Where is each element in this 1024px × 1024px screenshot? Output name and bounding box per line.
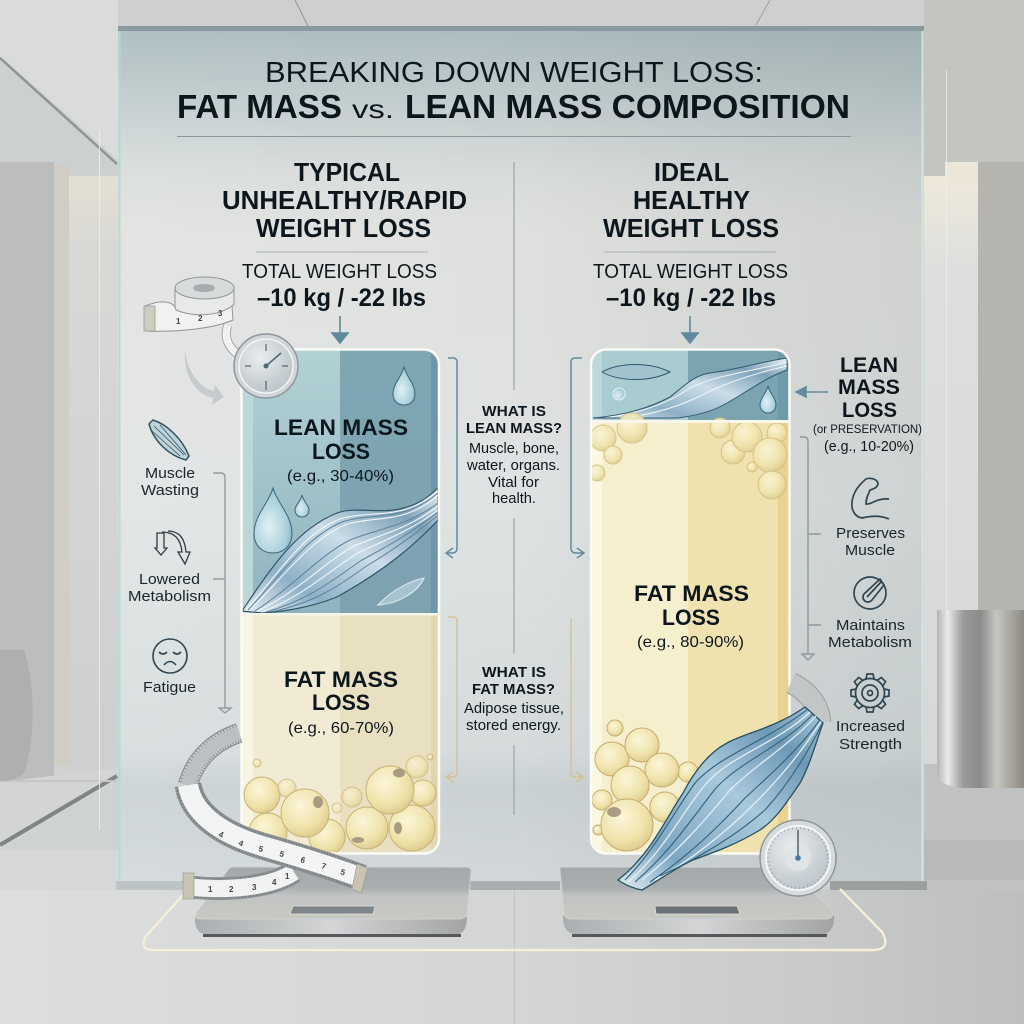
tape measure: large, left: 7 bbox=[320, 861, 328, 871]
callout: what is lean mass: water, organs. bbox=[466, 458, 560, 474]
callout: what is lean mass: LEAN MASS? bbox=[466, 420, 562, 437]
right bar outline bbox=[591, 350, 790, 854]
title: LEAN MASS COMPOSITION bbox=[405, 88, 850, 125]
heading: healthy weight loss bbox=[603, 159, 779, 243]
segment: fat mass bbox=[242, 615, 439, 853]
clock: right bbox=[760, 820, 836, 896]
bracket arrows: right bar bbox=[571, 358, 584, 558]
left bar labels: fat: (e.g., 60-70%) bbox=[288, 720, 394, 737]
callout: what is lean mass: health. bbox=[492, 491, 536, 507]
heading: unhealthy weight loss: UNHEALTHY/RAPID bbox=[222, 187, 467, 215]
tape roll: top left: 1 bbox=[176, 317, 181, 326]
label: lean mass loss right: MASS bbox=[838, 375, 900, 399]
total weight loss: left: TOTAL WEIGHT LOSS bbox=[242, 260, 437, 283]
background: stone vase bbox=[0, 650, 33, 781]
tape: main strip bbox=[188, 785, 362, 878]
large muscle: right bbox=[618, 707, 823, 890]
label: increased strength: Strength bbox=[839, 736, 902, 753]
right stacked bar bbox=[589, 350, 789, 853]
right icons column bbox=[828, 478, 912, 753]
title: BREAKING DOWN WEIGHT LOSS: bbox=[265, 57, 763, 89]
center divider bbox=[513, 162, 515, 815]
icon: gauge bbox=[854, 577, 886, 609]
tape measure: large, left: 4 bbox=[272, 878, 277, 887]
left bar labels: lean: LOSS bbox=[312, 439, 370, 464]
icon: muscle bbox=[149, 420, 189, 460]
left bar labels: lean: LEAN MASS bbox=[274, 415, 408, 440]
total weight loss: right: TOTAL WEIGHT LOSS bbox=[593, 260, 788, 283]
heading: healthy weight loss: IDEAL bbox=[654, 159, 729, 187]
callout: what is lean mass: WHAT IS bbox=[482, 403, 546, 420]
small muscle and drops bbox=[602, 364, 776, 413]
label: lean mass loss right bbox=[813, 353, 922, 455]
tape: lower strip bbox=[190, 872, 294, 889]
callout: what is fat mass: WHAT IS bbox=[482, 664, 546, 681]
label: preserves muscle bbox=[836, 525, 905, 559]
arrow: total to right bar bbox=[682, 316, 698, 343]
left bar labels: lean bbox=[274, 415, 408, 485]
tape measure: behind right muscle bbox=[791, 683, 820, 722]
label: maintains metabolism bbox=[828, 617, 912, 651]
tape measure: large, left: 4 bbox=[237, 838, 245, 849]
icon: tired face bbox=[153, 639, 187, 673]
callout: what is lean mass: Vital for bbox=[488, 475, 539, 491]
label: maintains metabolism: Metabolism bbox=[828, 634, 912, 651]
title: vs. bbox=[352, 94, 394, 124]
heading: healthy weight loss: HEALTHY bbox=[633, 187, 750, 215]
left bar labels: fat bbox=[284, 667, 398, 737]
floor glow line bbox=[143, 889, 885, 950]
label: muscle wasting: Wasting bbox=[141, 482, 199, 499]
bracket arrows: left bar bbox=[446, 358, 457, 558]
callout: what is lean mass bbox=[466, 403, 562, 507]
fat cells: bottom bbox=[592, 720, 698, 851]
right bar labels: fat bbox=[634, 581, 749, 651]
scale: left bbox=[195, 867, 471, 937]
label: muscle wasting: Muscle bbox=[145, 465, 195, 482]
label: lean mass loss right: LEAN bbox=[840, 353, 898, 377]
title: FAT MASS bbox=[177, 88, 342, 125]
fat cells: top bbox=[589, 413, 787, 499]
heading: unhealthy weight loss: WEIGHT LOSS bbox=[256, 215, 431, 243]
heading: healthy weight loss: WEIGHT LOSS bbox=[603, 215, 779, 243]
label: preserves muscle: Muscle bbox=[845, 542, 895, 559]
label: lowered metabolism: Metabolism bbox=[128, 588, 211, 605]
label: lowered metabolism: Lowered bbox=[139, 571, 200, 588]
tape measure: large, left: 3 bbox=[252, 883, 257, 892]
segment: lean mass bbox=[591, 350, 789, 420]
clock: left bbox=[234, 334, 298, 398]
bracket arrow: symptoms bbox=[213, 473, 231, 713]
total weight loss: right bbox=[593, 260, 788, 312]
left icons column bbox=[128, 420, 211, 696]
arrow: lean callout bbox=[796, 387, 828, 397]
callout: what is fat mass: stored energy. bbox=[466, 718, 561, 734]
arrow: total to left bar bbox=[332, 316, 348, 343]
fat cells bbox=[244, 754, 436, 855]
label: maintains metabolism: Maintains bbox=[836, 617, 905, 634]
icon: flexed arm bbox=[852, 478, 889, 519]
right bar labels: fat: LOSS bbox=[662, 605, 720, 630]
title bbox=[177, 57, 850, 125]
callout: what is fat mass: Adipose tissue, bbox=[464, 701, 564, 717]
label: lean mass loss right: (or PRESERVATION) bbox=[813, 424, 922, 436]
heading: unhealthy weight loss: TYPICAL bbox=[294, 159, 400, 187]
total weight loss: right: –10 kg / -22 lbs bbox=[606, 284, 776, 312]
tape roll: top left: 3 bbox=[218, 309, 223, 318]
total weight loss: left bbox=[242, 260, 437, 312]
heading: unhealthy weight loss bbox=[222, 159, 467, 243]
callout: what is lean mass: Muscle, bone, bbox=[469, 441, 559, 457]
left stacked bar bbox=[242, 350, 439, 855]
label: fatigue: Fatigue bbox=[143, 679, 196, 696]
icon: lowered metabolism bbox=[155, 531, 190, 564]
tape: upper back strip bbox=[188, 733, 239, 785]
muscle illustration bbox=[242, 488, 438, 613]
label: increased strength bbox=[836, 718, 905, 753]
tape measure: large, left: 5 bbox=[257, 844, 265, 854]
background: metal bin bbox=[937, 610, 1024, 788]
scale: right bbox=[560, 867, 834, 937]
tape measure: large, left: 5 bbox=[278, 849, 286, 859]
label: muscle wasting bbox=[141, 465, 199, 499]
left bar labels: fat: LOSS bbox=[312, 690, 370, 715]
label: increased strength: Increased bbox=[836, 718, 905, 735]
label: lowered metabolism bbox=[128, 571, 211, 605]
glass display panel bbox=[116, 26, 927, 890]
muscle: top segment bbox=[593, 358, 787, 418]
segment: lean mass bbox=[242, 350, 439, 613]
tape measure: large, left bbox=[183, 733, 368, 899]
tape measure: large, left: 4 bbox=[217, 830, 225, 840]
right bar labels: fat: FAT MASS bbox=[634, 581, 749, 606]
right bar labels: fat: (e.g., 80-90%) bbox=[637, 634, 744, 651]
bracket arrow: benefits bbox=[800, 437, 821, 660]
callout: what is fat mass bbox=[464, 664, 564, 734]
left bar labels: lean: (e.g., 30-40%) bbox=[287, 468, 394, 485]
segment: fat mass bbox=[591, 423, 789, 853]
tape roll: top left bbox=[144, 277, 244, 358]
small muscle bbox=[378, 578, 424, 605]
water drops bbox=[254, 367, 415, 553]
left bar outline bbox=[242, 350, 439, 854]
total weight loss: left: –10 kg / -22 lbs bbox=[257, 284, 426, 312]
callout: what is fat mass: FAT MASS? bbox=[472, 681, 555, 698]
tape measure: large, left: 2 bbox=[229, 885, 234, 894]
label: lean mass loss right: (e.g., 10-20%) bbox=[824, 439, 914, 455]
label: preserves muscle: Preserves bbox=[836, 525, 905, 542]
left bar labels: fat: FAT MASS bbox=[284, 667, 398, 692]
tape measure: large, left: 1 bbox=[285, 872, 290, 881]
tape measure: large, left: 5 bbox=[339, 867, 347, 877]
tape measure: large, left: 6 bbox=[299, 855, 307, 865]
icon: gear bbox=[851, 674, 889, 712]
tape roll: top left: 2 bbox=[198, 314, 203, 323]
swoosh arrow bbox=[185, 350, 224, 405]
label: lean mass loss right: LOSS bbox=[842, 398, 897, 422]
tape measure: large, left: 1 bbox=[208, 885, 213, 894]
